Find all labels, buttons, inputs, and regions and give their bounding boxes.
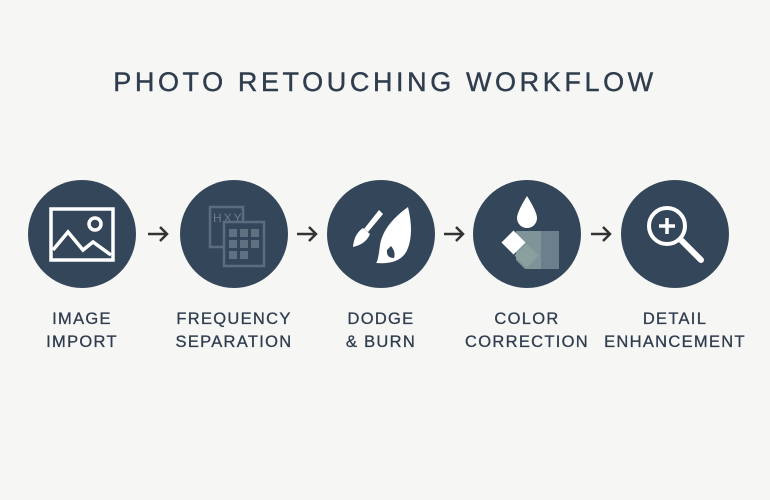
label 2	[176, 310, 292, 351]
label 4	[465, 310, 589, 351]
label 4: CORRECTION	[465, 333, 589, 351]
label 5: DETAIL	[643, 310, 707, 328]
arrow 4	[591, 227, 610, 241]
arrow 2	[297, 227, 316, 241]
step 4 icon: color correction	[473, 180, 581, 288]
label 1	[46, 310, 118, 351]
label 1: IMAGE	[52, 310, 112, 328]
step 3 icon: dodge and burn	[327, 180, 435, 288]
label 5: ENHANCEMENT	[604, 333, 746, 351]
label 4: COLOR	[494, 310, 560, 328]
label 3: & BURN	[346, 333, 416, 351]
label 5	[604, 310, 746, 351]
step 2 icon: frequency separation: HXY	[213, 211, 244, 225]
label 3	[346, 310, 416, 351]
step 2 icon: frequency separation	[180, 180, 288, 288]
label 2: SEPARATION	[176, 333, 292, 351]
label 1: IMPORT	[46, 333, 118, 351]
step 5 icon: detail enhancement	[621, 180, 729, 288]
title: PHOTO RETOUCHING WORKFLOW	[113, 67, 657, 97]
arrow 3	[444, 227, 463, 241]
arrow 1	[148, 227, 167, 241]
label 3: DODGE	[347, 310, 414, 328]
label 2: FREQUENCY	[176, 310, 292, 328]
step 1 icon: image import	[28, 180, 136, 288]
